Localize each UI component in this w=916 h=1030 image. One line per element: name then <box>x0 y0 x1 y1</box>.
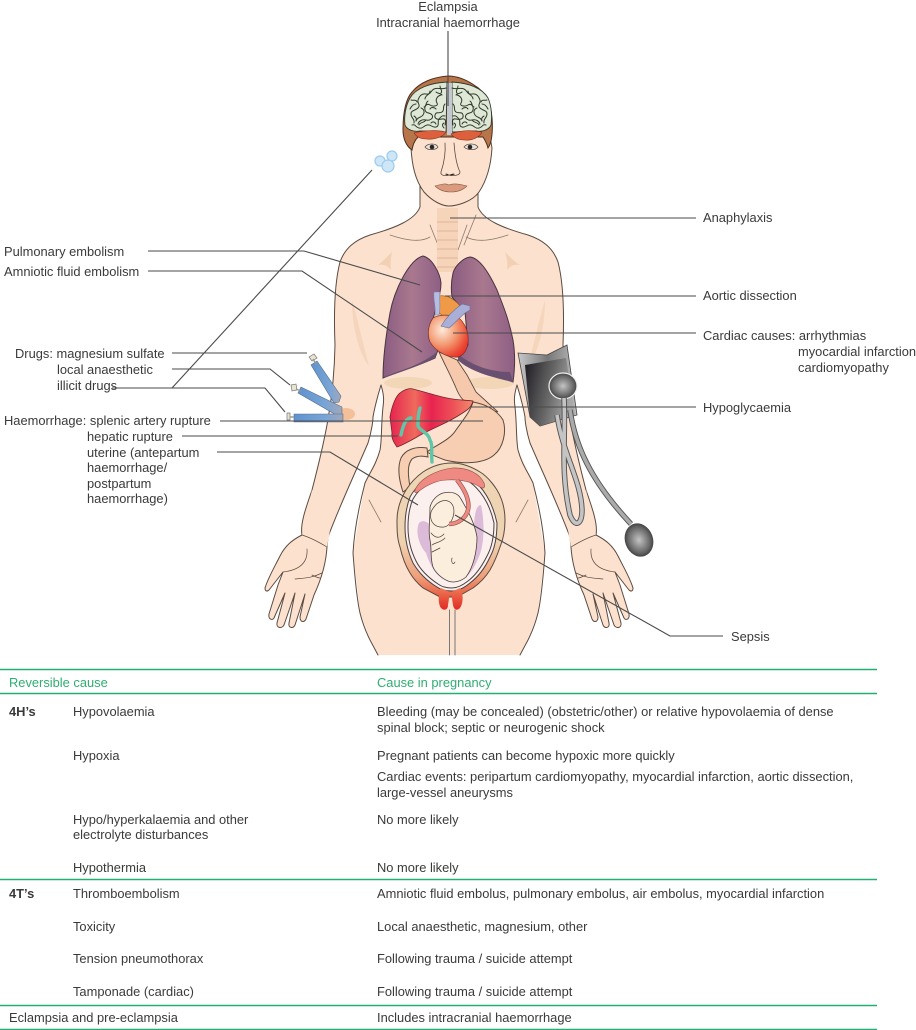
section: 4T's: Tension pneumothorax <box>73 951 204 966</box>
section: 4T's: 4T’s <box>9 886 34 901</box>
icon: syringes <box>287 354 355 422</box>
label: pulmonary embolism: Pulmonary embolism <box>4 244 124 259</box>
section: 4T's: Local anaesthetic, magnesium, other <box>377 919 588 934</box>
brain <box>405 82 492 140</box>
placenta <box>415 468 485 493</box>
label: haemorrhage: haemorrhage) <box>87 491 168 506</box>
uterus <box>397 463 505 655</box>
trachea <box>437 208 458 272</box>
intestine <box>399 447 428 492</box>
head <box>403 76 492 206</box>
icon: right hand <box>568 490 633 627</box>
label: drugs: Drugs: magnesium sulfate <box>15 346 165 361</box>
stomach <box>427 402 505 463</box>
liver <box>390 389 473 447</box>
label: haemorrhage: haemorrhage/ <box>87 460 168 475</box>
bile ducts <box>401 408 432 462</box>
section: 4H's: Bleeding (may be concealed) (obstetric/other) or relative hypovolaemia of dense <box>377 704 834 719</box>
label: aortic dissection: Aortic dissection <box>703 288 797 303</box>
section: 4H's: Hypothermia <box>73 860 147 875</box>
lungs <box>383 256 514 382</box>
oesophagus <box>439 352 498 412</box>
row: eclampsia: Eclampsia and pre-eclampsia <box>9 1010 179 1025</box>
label: haemorrhage <box>4 413 211 506</box>
leader lines <box>112 31 723 636</box>
vagina <box>450 610 455 655</box>
label: cardiac causes: myocardial infarction <box>798 344 916 359</box>
table header: Reversible cause <box>9 675 108 690</box>
section: 4H's: Hypo/hyperkalaemia and other <box>73 812 249 827</box>
label: anaphylaxis: Anaphylaxis <box>703 210 772 225</box>
label: haemorrhage: hepatic rupture <box>87 429 173 444</box>
row: eclampsia <box>9 1010 572 1025</box>
cervix <box>439 588 463 610</box>
section: 4H's: Cardiac events: peripartum cardiomyopathy, myocardial infarction, aortic dissection, <box>377 769 853 784</box>
label: haemorrhage: postpartum <box>87 476 151 491</box>
label: cardiac causes <box>703 328 916 375</box>
nose <box>441 143 460 176</box>
label: cardiac causes: Cardiac causes: arrhythmias <box>703 328 866 343</box>
section: 4H's: Hypoxia <box>73 748 120 763</box>
section: 4H's: No more likely <box>377 860 459 875</box>
table header <box>9 675 492 690</box>
label: cardiac causes: cardiomyopathy <box>798 360 889 375</box>
section: 4H's: No more likely <box>377 812 459 827</box>
label: sepsis: Sepsis <box>731 629 770 644</box>
label: drugs: local anaesthetic <box>57 362 153 377</box>
section: 4H's: 4H’s <box>9 704 36 719</box>
label: drugs <box>15 346 165 393</box>
label: amniotic fluid embolism: Amniotic fluid embolism <box>4 264 139 279</box>
hair <box>403 76 492 150</box>
section: 4H's <box>9 704 853 875</box>
table: reversible causes in pregnancy <box>0 670 877 1030</box>
fetus <box>429 492 477 582</box>
section: 4H's: Hypovolaemia <box>73 704 155 719</box>
amniotic fluid <box>417 505 484 582</box>
section: 4T's: Thromboembolism <box>73 886 180 901</box>
row: eclampsia: Includes intracranial haemorrhage <box>377 1010 572 1025</box>
section: 4H's: Pregnant patients can become hypoxic more quickly <box>377 748 675 763</box>
label: brain causes: Intracranial haemorrhage <box>376 15 520 30</box>
section: 4T's: Toxicity <box>73 919 116 934</box>
section: 4T's: Tamponade (cardiac) <box>73 984 194 999</box>
section: 4T's: Following trauma / suicide attempt <box>377 951 573 966</box>
body: skin fill and outline <box>302 180 596 655</box>
eyes <box>425 144 478 150</box>
section: 4H's: spinal block; septic or neurogenic shock <box>377 720 605 735</box>
icon: left hand <box>265 490 330 627</box>
section: 4H's: electrolyte disturbances <box>73 827 208 842</box>
section: 4H's: large-vessel aneurysms <box>377 785 513 800</box>
label: drugs: illicit drugs <box>57 378 117 393</box>
icon: bubbles <box>375 151 397 172</box>
section: 4T's: Amniotic fluid embolus, pulmonary embolus, air embolus, myocardial infarction <box>377 886 824 901</box>
heart <box>428 292 470 357</box>
figure: pregnant woman anatomy <box>265 76 658 655</box>
label: brain causes <box>376 0 520 30</box>
table header: Cause in pregnancy <box>377 675 492 690</box>
umbilical cord <box>449 480 468 524</box>
label: haemorrhage: Haemorrhage: splenic artery rupture <box>4 413 211 428</box>
label: hypoglycaemia: Hypoglycaemia <box>703 400 792 415</box>
section: 4T's <box>9 886 824 999</box>
mouth <box>435 184 467 192</box>
label: haemorrhage: uterine (antepartum <box>87 445 199 460</box>
section: 4T's: Following trauma / suicide attempt <box>377 984 573 999</box>
icon: blood pressure cuff <box>518 345 658 561</box>
